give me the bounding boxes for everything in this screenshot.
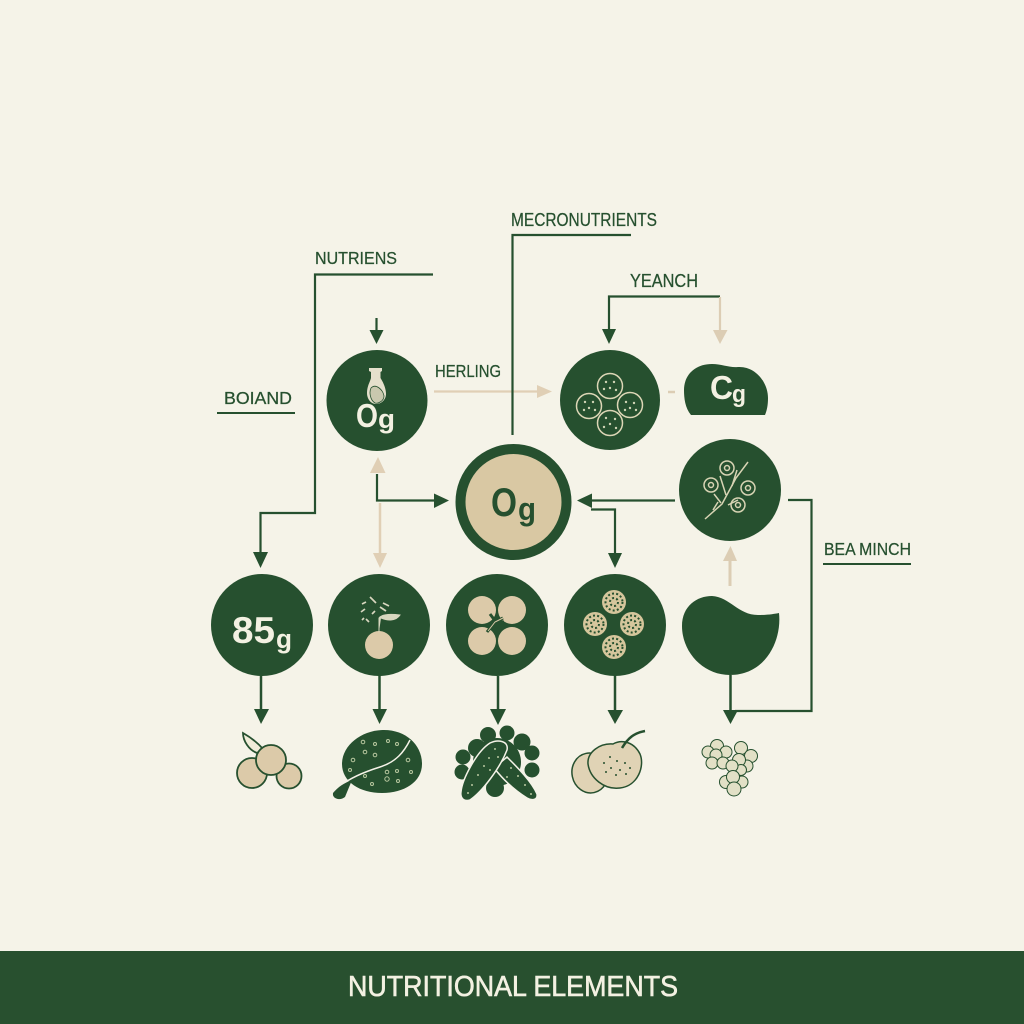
icon: green leaf with seeds xyxy=(333,730,422,799)
circle: 85g xyxy=(211,574,313,676)
arrow: yeanch connector dark xyxy=(602,296,720,344)
circle: bottle 0g: O xyxy=(356,397,378,434)
arrow: tan down to fruit circle xyxy=(373,503,387,568)
blob: Cg: g xyxy=(732,381,746,408)
label: boiand: BOIAND xyxy=(224,388,292,408)
arrow: mecronutrients connector xyxy=(512,235,631,435)
circle: bottle 0g: g xyxy=(378,404,395,434)
circle: centre 0g xyxy=(460,449,566,555)
circle: branch xyxy=(679,439,781,541)
arrow: yeanch connector tan xyxy=(713,297,728,344)
arrow: right circle to centre xyxy=(577,494,675,508)
circle: bottle 0g xyxy=(326,350,428,451)
arrow: down from fruit xyxy=(372,675,387,724)
label: herling: HERLING xyxy=(435,361,501,381)
arrow: down from leaf xyxy=(723,675,738,724)
title banner xyxy=(0,951,1024,1024)
icon: tan apples xyxy=(568,731,645,796)
label: nutriens: NUTRIENS xyxy=(315,248,397,268)
title banner: NUTRITIONAL ELEMENTS xyxy=(348,971,678,1003)
arrow: down from seeds xyxy=(608,675,623,724)
icon: cucumbers and peas xyxy=(454,726,540,801)
blob: Cg xyxy=(684,364,768,415)
dash tan xyxy=(668,391,675,393)
circle: fruit sprout xyxy=(328,574,430,676)
arrow: tan up to top left circle xyxy=(370,457,386,473)
circle: 85g: g xyxy=(276,624,292,654)
arrow: down from discs xyxy=(490,676,506,725)
circle: four tan discs xyxy=(446,574,548,676)
arrow: right loop xyxy=(735,500,812,711)
icon: tan fruits xyxy=(237,733,302,788)
circle: 85g: 85 xyxy=(232,610,275,651)
label: mecronutrients: MECRONUTRIENTS xyxy=(511,210,657,230)
label: boiand xyxy=(217,388,295,413)
arrow: dark to centre xyxy=(377,474,449,508)
arrow: down from 85g xyxy=(254,675,269,724)
icon: grape cluster xyxy=(702,740,758,796)
arrow: into top left circle xyxy=(370,318,384,344)
circle: centre 0g: O xyxy=(491,481,517,525)
circle: four seeded discs xyxy=(564,574,666,676)
blob: Cg: C xyxy=(710,369,733,406)
circle: centre 0g: g xyxy=(518,491,536,527)
label: bea minch: BEA MINCH xyxy=(824,539,911,559)
blob: plain leaf xyxy=(682,596,779,675)
arrow: tan up to right circle xyxy=(723,546,737,586)
arrow: nutriens connector to 85g xyxy=(253,274,433,568)
arrow: branch down xyxy=(591,510,622,568)
arrow: herling tan xyxy=(434,385,552,398)
label: yeanch: YEANCH xyxy=(630,271,698,291)
circle: four rounds xyxy=(560,350,660,450)
